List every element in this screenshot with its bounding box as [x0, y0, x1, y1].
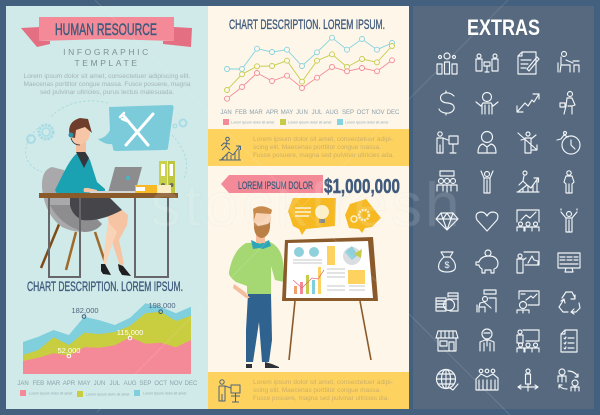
area chart: 115,000 — [117, 328, 143, 337]
band one text: scing elit. Maecenas porttitor congue massa. — [253, 144, 381, 151]
icon: presenter with bar chart — [517, 252, 539, 273]
icon: person at computer — [558, 52, 579, 72]
area chart: MAY — [78, 381, 90, 387]
icon: heart — [476, 212, 498, 231]
line chart: MAY — [281, 110, 293, 116]
line chart: JUL — [312, 110, 323, 116]
line chart: APR — [266, 110, 279, 116]
icon: piggy bank — [476, 250, 498, 273]
band two text: Fusce posuere, magna sed pulvinar ultricies dia. — [253, 395, 389, 402]
heading: line chart: CHART DESCRIPTION. LOREM IPSUM. — [229, 16, 385, 32]
line chart: DEC — [387, 110, 400, 116]
area chart legend: Lorem ipsum dolor sit amet — [143, 392, 186, 396]
yellow text band two — [208, 372, 409, 409]
icon: coin stacks — [436, 293, 458, 311]
line chart: JAN — [220, 110, 232, 116]
icon: person with arrow down — [518, 132, 537, 153]
icon: dashboard monitor — [558, 253, 580, 272]
man presenting — [229, 206, 284, 368]
woman at desk — [55, 118, 131, 276]
intro text: Lorem ipsum dolor sit amet, consectetuer adipiscing elit. — [24, 73, 191, 80]
icon: diamond — [436, 213, 458, 230]
icon: team bar chart — [476, 369, 498, 390]
band one text — [253, 136, 394, 159]
line chart: JUN — [296, 110, 308, 116]
icon: running from clock — [557, 132, 580, 154]
icon: person with direction arrows — [518, 369, 538, 391]
icon: team idea — [437, 53, 457, 74]
area chart: JAN — [17, 381, 29, 387]
line chart: NOV — [371, 110, 385, 116]
area chart: AUG — [124, 381, 137, 387]
area chart legend: Lorem ipsum dolor sit amet — [86, 392, 129, 396]
icon: presenter with monitor — [219, 380, 240, 402]
line chart: FEB — [235, 110, 247, 116]
icon: money bag: $ — [444, 260, 450, 270]
icon: person at desk sign — [477, 290, 496, 312]
area chart — [17, 301, 198, 387]
area chart: 52,000 — [58, 346, 80, 355]
icon: person hands up — [481, 171, 493, 193]
intro text — [24, 73, 191, 96]
icon: presenter and audience — [517, 330, 539, 352]
band two text: scing elit. Maecenas porttitor congue massa. — [253, 387, 381, 394]
line chart: SEP — [342, 110, 354, 116]
speech bubble with tools — [98, 105, 174, 151]
dashed arc — [26, 101, 187, 178]
binders and folder — [135, 161, 175, 193]
intro text: Maecenas porttitor congue massa. Fusce posuere, magna — [24, 81, 191, 88]
chair — [41, 167, 105, 270]
heading: area chart: CHART DESCRIPTION. LOREM IPSUM. — [27, 278, 183, 294]
area chart: NOV — [169, 381, 183, 387]
ribbon title — [21, 17, 192, 47]
line chart: MAR — [249, 110, 263, 116]
icon: people exchange — [558, 369, 579, 391]
area chart: JUL — [109, 381, 121, 387]
area chart: 198,000 — [148, 301, 176, 310]
intro text: sed pulvinar ultricies, purus lectus malesuada. — [40, 89, 174, 96]
pink arrow label: LOREM IPSUM DOLOR — [238, 180, 313, 192]
line chart legend — [223, 119, 388, 125]
panel: middle charts — [208, 6, 409, 409]
icon: person bust — [478, 132, 496, 153]
area chart: MAR — [47, 381, 61, 387]
speech bubble: gears — [345, 199, 381, 233]
icon: globe — [436, 370, 458, 390]
icon: recycle — [559, 292, 580, 314]
icon: person with chart board — [517, 291, 539, 313]
icon: person shrugging — [476, 92, 498, 114]
area chart: 182,000 — [71, 306, 99, 315]
panel: extras icons — [413, 6, 594, 409]
line chart — [220, 35, 400, 116]
band two text: Lorem ipsum dolor sit amet, consectetuer adipi- — [253, 379, 393, 386]
area chart: SEP — [139, 381, 151, 387]
area chart: JUN — [94, 381, 105, 387]
icon: audience and chart — [517, 210, 539, 231]
icon: dollar sign — [439, 91, 454, 115]
desk — [39, 193, 178, 277]
amount: $1,000,000 — [324, 176, 400, 198]
panel: left human resource — [6, 6, 208, 409]
area chart: DEC — [185, 381, 198, 387]
line chart legend: Lorem ipsum dolor sit amet — [345, 120, 388, 124]
extras title: EXTRAS — [467, 15, 540, 40]
speech bubble: idea — [288, 198, 336, 235]
watermark: stockfresh — [150, 171, 463, 240]
ribbon title: HUMAN RESOURCE — [55, 20, 157, 39]
presentation board — [282, 237, 378, 360]
band two text — [253, 379, 393, 402]
icon: climbing graph — [517, 171, 539, 192]
icon: shop — [436, 331, 458, 351]
line chart: OCT — [357, 110, 370, 116]
yellow text band one — [208, 129, 409, 166]
icon: falling arrow chart — [517, 94, 539, 112]
area chart: OCT — [154, 381, 167, 387]
icon: presenter and board — [437, 132, 458, 153]
pink arrow label — [221, 175, 323, 193]
subtitle: TEMPLATE — [74, 58, 140, 68]
icon: person with dollars — [561, 209, 577, 232]
area chart legend — [20, 390, 186, 397]
band one text: Lorem ipsum dolor sit amet, consectetuer adipi- — [253, 136, 393, 143]
icon: checklist — [561, 330, 577, 352]
line chart legend: Lorem ipsum dolor sit amet — [288, 120, 331, 124]
line chart: AUG — [325, 110, 339, 116]
icon: gears — [27, 120, 186, 143]
laptop — [90, 167, 142, 193]
area chart: APR — [63, 381, 76, 387]
band one text: Fusce posuere, magna sed pulvinar ultricies ada. — [253, 152, 394, 159]
subtitle: INFOGRAPHIC — [63, 47, 151, 57]
icon: standing person — [564, 171, 574, 193]
icon: business person face — [480, 329, 494, 351]
area chart legend: Lorem ipsum dolor sit amet — [29, 392, 72, 396]
area chart: FEB — [32, 381, 44, 387]
icon: meeting at table — [476, 54, 498, 72]
icon: businessman walking — [560, 92, 575, 114]
icon: money bag — [439, 252, 455, 272]
icon: document with pen — [518, 52, 539, 74]
subtitle — [63, 47, 151, 68]
icon: climbing growth chart — [219, 137, 241, 160]
line chart legend: Lorem ipsum dolor sit amet — [231, 120, 274, 124]
icon: team meeting — [437, 171, 457, 192]
